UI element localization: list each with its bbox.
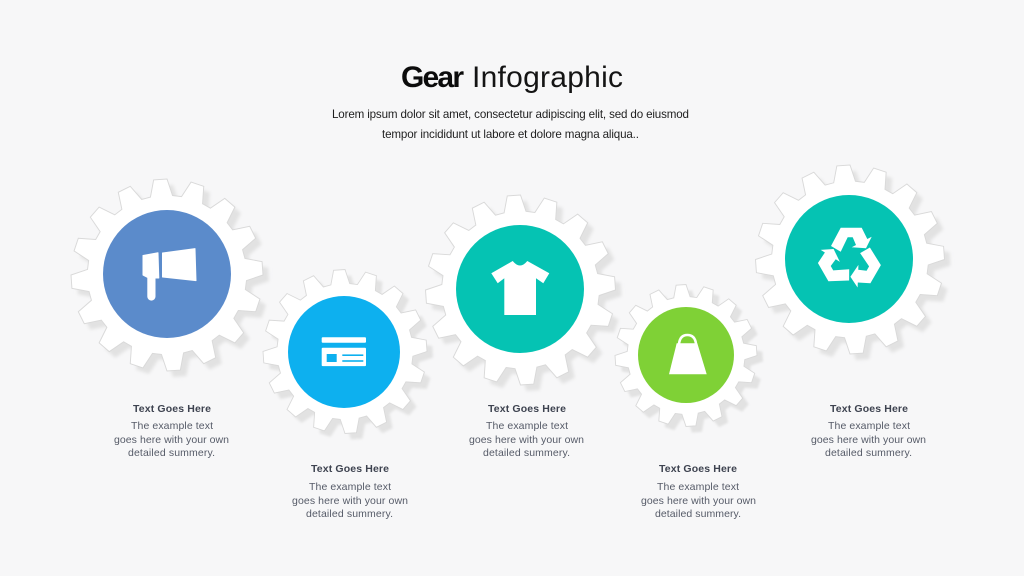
caption 3: The example text <box>486 420 568 432</box>
caption 2: goes here with your own <box>292 495 408 507</box>
subtitle text: Lorem ipsum dolor sit amet, consectetur adipiscing elit, sed do eiusmod <box>332 108 689 121</box>
icon: t-shirt <box>491 261 549 315</box>
caption 1: The example text <box>131 420 213 432</box>
caption 1: Text Goes Here <box>133 403 211 415</box>
gear 5: recycle <box>749 159 957 366</box>
icon: megaphone <box>143 249 196 300</box>
gear 4: shopping bag <box>610 280 768 437</box>
caption 3: detailed summery. <box>483 447 570 459</box>
subtitle text: tempor incididunt ut labore et dolore magna aliqua.. <box>382 128 639 141</box>
caption 3 <box>469 403 584 459</box>
caption 2: detailed summery. <box>306 508 393 520</box>
caption 2: Text Goes Here <box>311 463 389 475</box>
caption 3: Text Goes Here <box>488 403 566 415</box>
caption 1: detailed summery. <box>128 447 215 459</box>
title: Gear <box>401 61 464 94</box>
caption 1 <box>114 403 229 459</box>
caption 1: goes here with your own <box>114 434 229 446</box>
caption 5: detailed summery. <box>825 447 912 459</box>
caption 5 <box>811 403 926 459</box>
caption 4: The example text <box>657 481 739 493</box>
caption 5: goes here with your own <box>811 434 926 446</box>
icon: shopping bag <box>669 335 707 374</box>
title: Infographic <box>472 61 623 94</box>
caption 5: The example text <box>828 420 910 432</box>
caption 5: Text Goes Here <box>830 403 908 415</box>
icon: recycle <box>813 228 886 292</box>
subtitle text <box>332 108 689 141</box>
gear 2: card <box>258 264 438 445</box>
caption 4: Text Goes Here <box>659 463 737 475</box>
caption 2 <box>292 463 408 520</box>
title <box>401 61 623 94</box>
caption 4 <box>641 463 756 520</box>
gear 3: t-shirt <box>419 189 628 397</box>
caption 4: detailed summery. <box>655 508 741 520</box>
caption 4: goes here with your own <box>641 495 756 507</box>
caption 2: The example text <box>309 481 391 493</box>
icon: credit card <box>322 337 366 366</box>
gear 1: megaphone <box>65 173 275 383</box>
caption 3: goes here with your own <box>469 434 584 446</box>
